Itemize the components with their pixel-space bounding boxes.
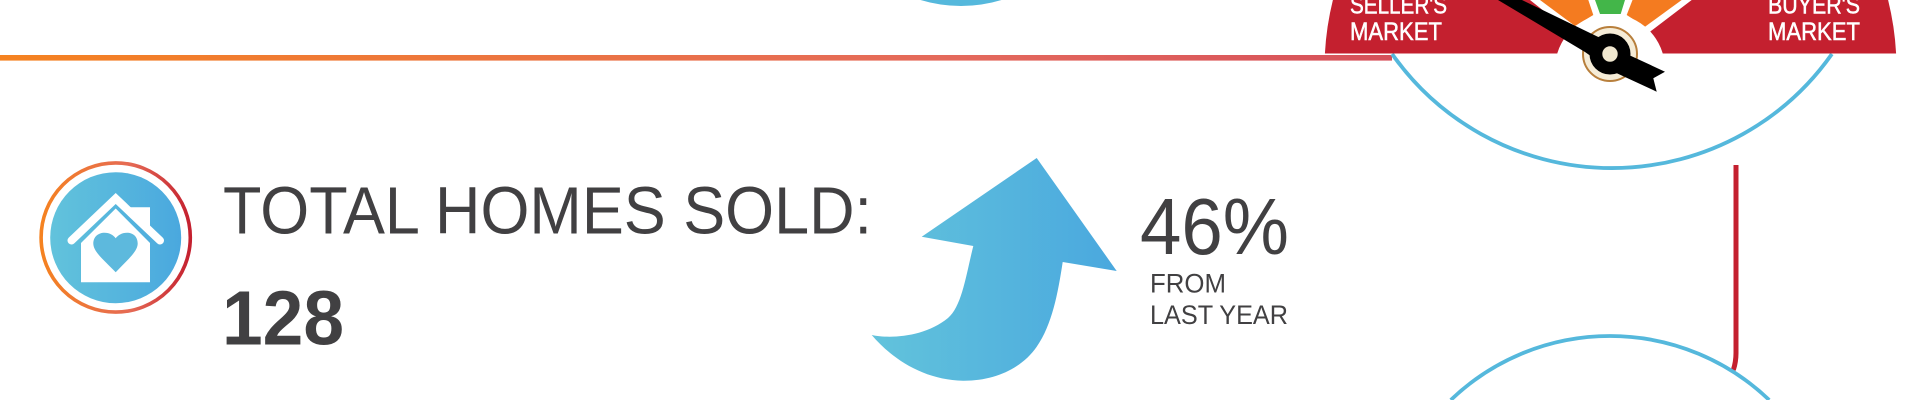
label: seller's market: MARKET	[1350, 18, 1442, 46]
heading: total homes sold: TOTAL HOMES SOLD:	[223, 174, 872, 248]
arrow: upward trend	[872, 158, 1117, 381]
gauge right orange segment	[1627, 0, 1682, 27]
label: buyer's market	[1768, 0, 1860, 46]
label: seller's market	[1350, 0, 1447, 46]
gauge left orange segment	[1540, 0, 1593, 26]
caption: from last year: LAST YEAR	[1150, 300, 1288, 330]
top blue circle fragment	[920, 0, 1002, 6]
caption: from last year	[1150, 269, 1288, 330]
gauge inner white hub area	[1555, 14, 1665, 124]
icon: house with heart	[41, 163, 190, 312]
gauge white gap	[1530, 0, 1692, 69]
label: buyer's market: MARKET	[1768, 18, 1860, 46]
gradient divider rule	[0, 55, 1392, 61]
market gauge	[1325, 0, 1896, 124]
lower circle outline	[1451, 336, 1769, 400]
gauge needle	[1498, 0, 1665, 92]
caption: from last year: FROM	[1150, 269, 1226, 299]
red connector line	[1733, 165, 1736, 370]
value: 46%: 46%	[1140, 182, 1289, 271]
gauge green segment	[1595, 0, 1625, 14]
gauge circle outline	[1392, 54, 1832, 168]
gauge red band	[1325, 0, 1896, 54]
value: 128: 128	[222, 276, 344, 362]
